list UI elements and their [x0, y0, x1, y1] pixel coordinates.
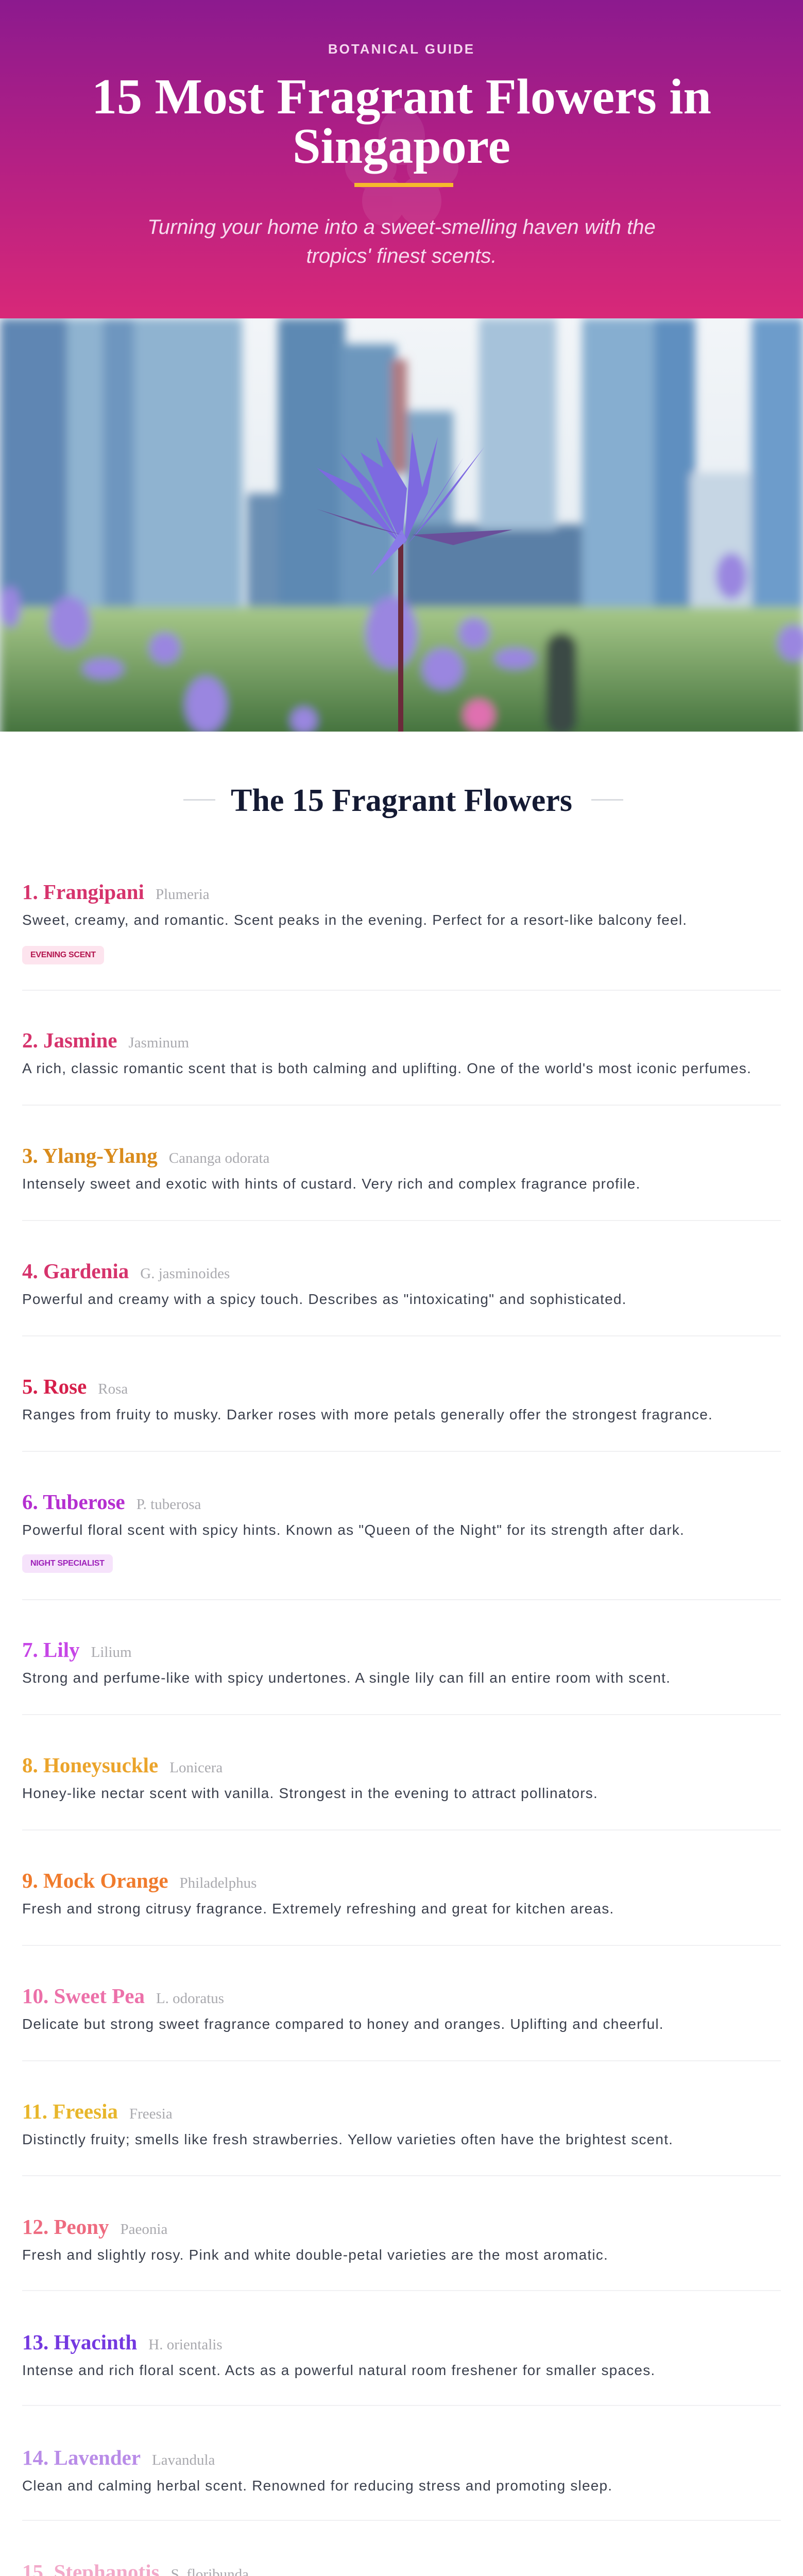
heading text: The 15 Fragrant Flowers: [231, 783, 572, 818]
subtitle: Turning your home into a sweet-smelling haven with the: [147, 216, 656, 239]
heading rule right: [591, 799, 623, 801]
hero photo: Singapore skyline with water lily: [0, 318, 803, 732]
item 10: Delicate but strong sweet fragrance compared to honey and oranges. Uplifting and cheerful.: [22, 2016, 664, 2032]
item 1: Sweet, creamy, and romantic. Scent peaks in the evening. Perfect for a resort-like balcony feel.: [22, 912, 687, 928]
item 11: Distinctly fruity; smells like fresh strawberries. Yellow varieties often have the brightest scent.: [22, 2131, 673, 2147]
central water lily: [398, 535, 403, 732]
badge: evening scent: EVENING SCENT: [30, 951, 96, 959]
badge: evening scent: [22, 946, 104, 964]
item 10: [22, 1984, 664, 2032]
item 3: Intensely sweet and exotic with hints of custard. Very rich and complex fragrance profile.: [22, 1176, 641, 1192]
item 9: 9. Mock Orange Philadelphus: [22, 1869, 257, 1892]
item 14: Clean and calming herbal scent. Renowned for reducing stress and promoting sleep.: [22, 2478, 612, 2494]
item 4: 4. Gardenia G. jasminoides: [22, 1259, 230, 1283]
item 11: 11. Freesia Freesia: [22, 2099, 173, 2123]
section heading: [183, 783, 623, 818]
item 11: [22, 2099, 673, 2147]
accent bar: [354, 183, 453, 187]
heading rule left: [183, 799, 215, 801]
item 14: 14. Lavender Lavandula: [22, 2446, 215, 2469]
item 4: [22, 1259, 627, 1307]
item 13: 13. Hyacinth H. orientalis: [22, 2330, 223, 2354]
item 12: Fresh and slightly rosy. Pink and white double-petal varieties are the most aromatic.: [22, 2247, 608, 2263]
item 13: Intense and rich floral scent. Acts as a powerful natural room freshener for smaller spaces.: [22, 2362, 655, 2378]
badge: night specialist: NIGHT SPECIALIST: [30, 1559, 105, 1568]
item 9: [22, 1869, 614, 1917]
badge: night specialist: [22, 1554, 113, 1573]
item 14: [22, 2446, 612, 2494]
item 7: 7. Lily Lilium: [22, 1638, 132, 1662]
item 6: 6. Tuberose P. tuberosa: [22, 1490, 201, 1514]
item 2: [22, 1028, 751, 1076]
main title: [92, 69, 711, 174]
item 9: Fresh and strong citrusy fragrance. Extremely refreshing and great for kitchen areas.: [22, 1901, 614, 1917]
item 8: [22, 1753, 598, 1801]
item 7: Strong and perfume-like with spicy undertones. A single lily can fill an entire room with scent.: [22, 1670, 671, 1686]
item 5: 5. Rose Rosa: [22, 1375, 128, 1398]
item 5: [22, 1375, 713, 1422]
item 6: [22, 1490, 685, 1573]
item 3: [22, 1144, 641, 1192]
item 2: A rich, classic romantic scent that is both calming and uplifting. One of the world's most iconic perfumes.: [22, 1060, 751, 1076]
main title: 15 Most Fragrant Flowers in: [92, 69, 711, 125]
faint flower watermark: [345, 108, 458, 226]
item 2: 2. Jasmine Jasminum: [22, 1028, 189, 1052]
item 3: 3. Ylang-Ylang Cananga odorata: [22, 1144, 269, 1167]
item 7: [22, 1638, 671, 1686]
item 10: 10. Sweet Pea L. odoratus: [22, 1984, 224, 2008]
eyebrow label: BOTANICAL GUIDE: [328, 41, 475, 57]
item 8: Honey-like nectar scent with vanilla. Strongest in the evening to attract pollinators.: [22, 1785, 598, 1801]
item 1: 1. Frangipani Plumeria: [22, 880, 210, 904]
subtitle: tropics' finest scents.: [306, 245, 497, 267]
item 6: Powerful floral scent with spicy hints. Known as "Queen of the Night" for its strength after dark.: [22, 1522, 685, 1538]
item 8: 8. Honeysuckle Lonicera: [22, 1753, 223, 1777]
item 13: [22, 2330, 655, 2378]
main title: Singapore: [293, 118, 510, 174]
item 12: 12. Peony Paeonia: [22, 2215, 167, 2239]
item 12: [22, 2215, 608, 2263]
item 4: Powerful and creamy with a spicy touch. Describes as "intoxicating" and sophisticated.: [22, 1291, 627, 1307]
item 5: Ranges from fruity to musky. Darker roses with more petals generally offer the strongest fragrance.: [22, 1406, 713, 1422]
subtitle: [147, 216, 656, 267]
header banner: [0, 0, 803, 318]
item 1: [22, 880, 687, 964]
